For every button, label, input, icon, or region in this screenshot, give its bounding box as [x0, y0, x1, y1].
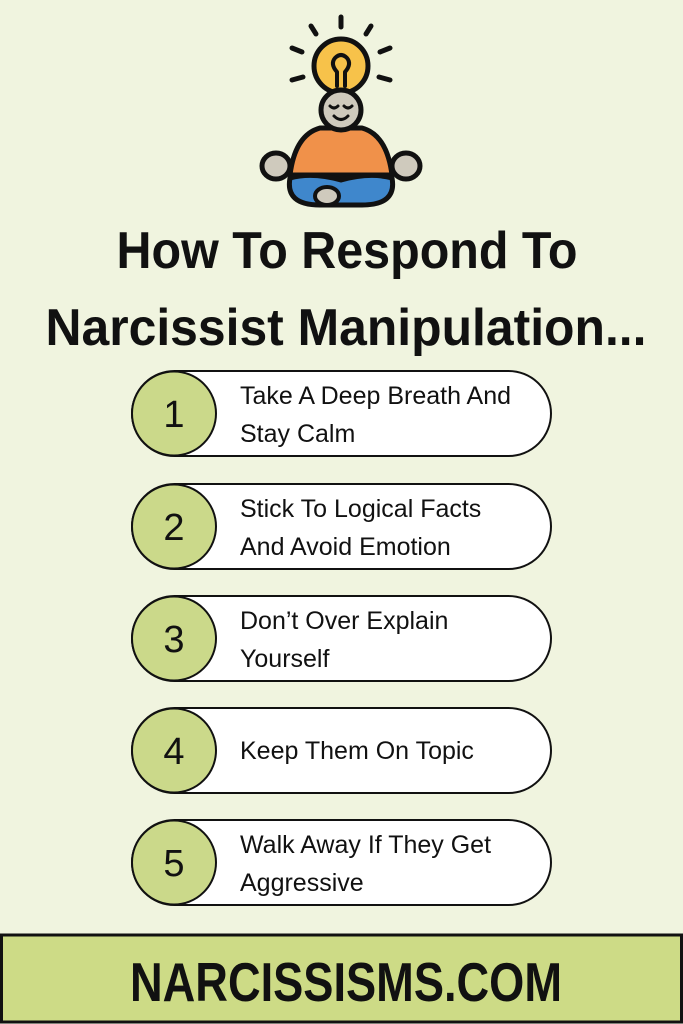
- item 3: 3: [163, 619, 185, 661]
- title: Narcissist Manipulation...: [46, 299, 646, 357]
- item 5: Walk Away If They Get: [240, 831, 491, 859]
- item 5: [132, 820, 551, 905]
- item 1: Stay Calm: [240, 420, 355, 448]
- icon: meditating person with lightbulb: [262, 17, 420, 205]
- item 4: Keep Them On Topic: [240, 737, 474, 765]
- item 1: [132, 371, 551, 456]
- footer banner: [2, 935, 682, 1022]
- title: [46, 222, 646, 357]
- item 4: [132, 708, 551, 793]
- item 2: 2: [163, 507, 185, 549]
- item 2: [132, 484, 551, 569]
- item 5: 5: [163, 843, 185, 885]
- item 2: And Avoid Emotion: [240, 533, 451, 561]
- title: How To Respond To: [116, 222, 578, 280]
- item 3: [132, 596, 551, 681]
- item 1: Take A Deep Breath And: [240, 382, 511, 410]
- item 5: Aggressive: [240, 869, 364, 897]
- item 2: Stick To Logical Facts: [240, 495, 481, 523]
- item 1: 1: [163, 394, 185, 436]
- item 4: 4: [163, 731, 185, 773]
- item 3: Yourself: [240, 645, 329, 673]
- footer banner: NARCISSISMS.COM: [130, 951, 562, 1013]
- item 3: Don’t Over Explain: [240, 607, 448, 635]
